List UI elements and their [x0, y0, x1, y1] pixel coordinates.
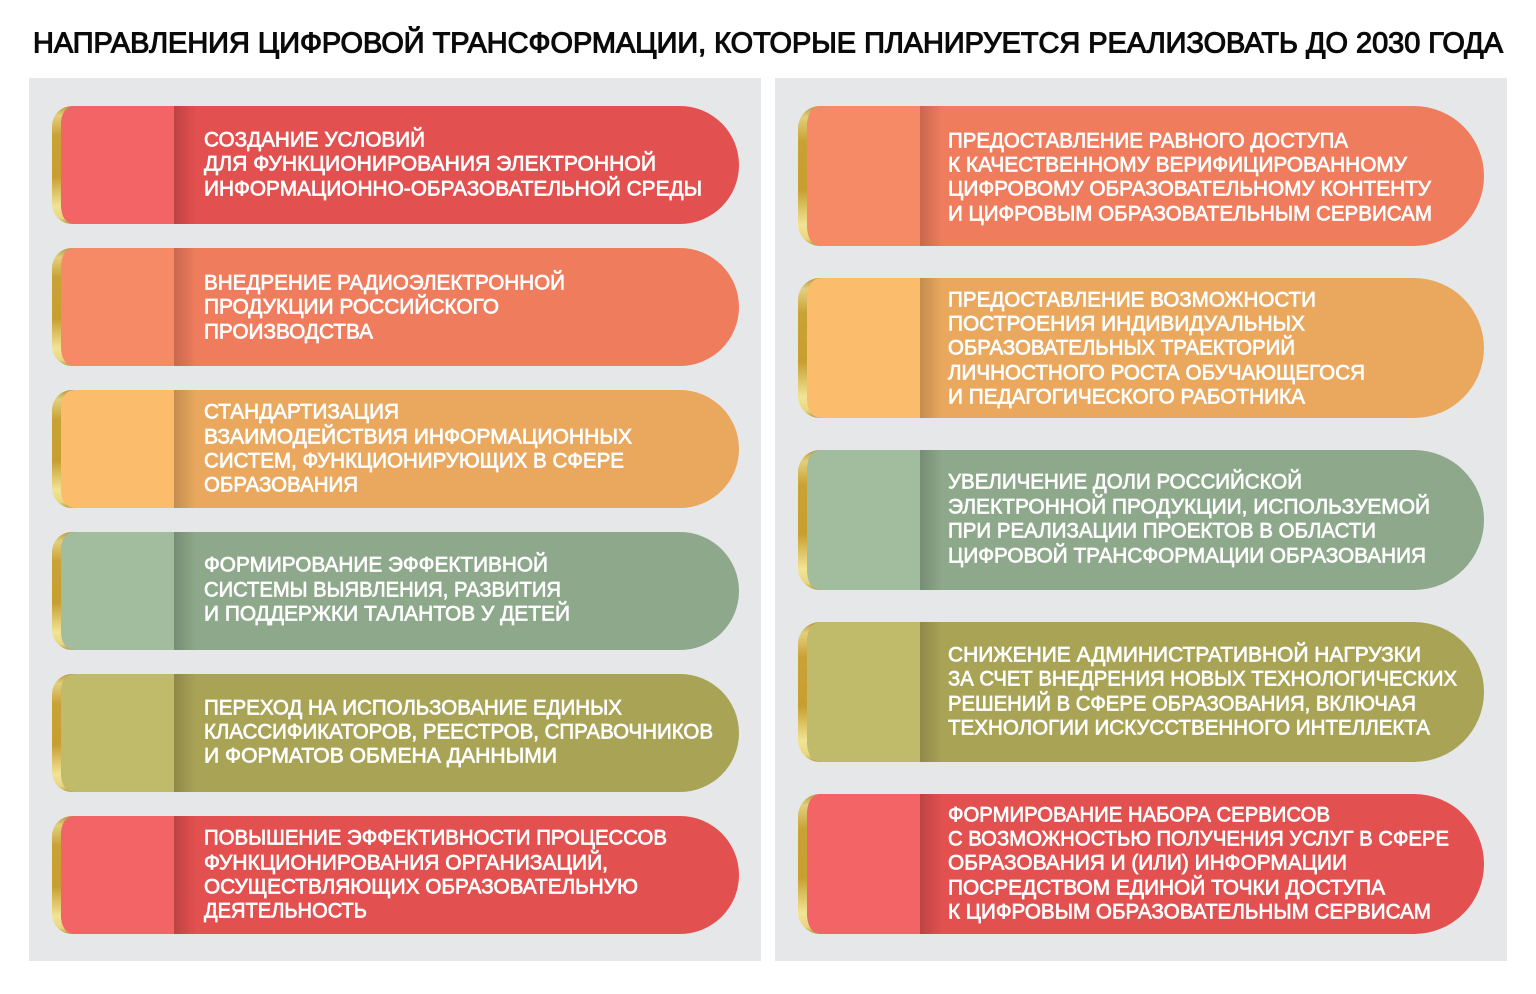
pill: доля российской продукции: ЦИФРОВОЙ ТРАНСФОРМАЦИИ ОБРАЗОВАНИЯ	[948, 544, 1426, 568]
pill: стандартизация	[52, 390, 739, 508]
pill: таланты: ФОРМИРОВАНИЕ ЭФФЕКТИВНОЙ	[204, 552, 548, 576]
pill: стандартизация: ОБРАЗОВАНИЯ	[204, 474, 358, 496]
pill: набор сервисов: С ВОЗМОЖНОСТЬЮ ПОЛУЧЕНИЯ УСЛУГ В СФЕРЕ	[948, 828, 1449, 850]
pill: набор сервисов	[798, 794, 1484, 934]
pill: доля российской продукции	[798, 450, 1484, 590]
pill: индивидуальные траектории: ПРЕДОСТАВЛЕНИЕ ВОЗМОЖНОСТИ	[948, 288, 1316, 312]
pill: доля российской продукции: ЭЛЕКТРОННОЙ ПРОДУКЦИИ, ИСПОЛЬЗУЕМОЙ	[948, 494, 1430, 518]
pill: таланты	[52, 532, 739, 650]
pill: радиоэлектронная продукция	[52, 248, 739, 366]
pill: электронная среда: ИНФОРМАЦИОННО-ОБРАЗОВАТЕЛЬНОЙ СРЕДЫ	[204, 176, 702, 200]
pill: административная нагрузка: РЕШЕНИЙ В СФЕРЕ ОБРАЗОВАНИЯ, ВКЛЮЧАЯ	[948, 692, 1416, 716]
pill: классификаторы: КЛАССИФИКАТОРОВ, РЕЕСТРОВ, СПРАВОЧНИКОВ	[204, 720, 713, 744]
pill: эффективность процессов: ДЕЯТЕЛЬНОСТЬ	[204, 900, 367, 922]
pill: равный доступ: К КАЧЕСТВЕННОМУ ВЕРИФИЦИРОВАННОМУ	[948, 154, 1408, 176]
pill: классификаторы: И ФОРМАТОВ ОБМЕНА ДАННЫМИ	[204, 744, 557, 768]
pill: административная нагрузка: СНИЖЕНИЕ АДМИНИСТРАТИВНОЙ НАГРУЗКИ	[948, 642, 1421, 666]
pill: индивидуальные траектории: ОБРАЗОВАТЕЛЬНЫХ ТРАЕКТОРИЙ	[948, 336, 1295, 360]
pill: электронная среда	[52, 106, 739, 224]
pill: набор сервисов: К ЦИФРОВЫМ ОБРАЗОВАТЕЛЬНЫМ СЕРВИСАМ	[948, 900, 1431, 924]
pill: электронная среда: СОЗДАНИЕ УСЛОВИЙ	[204, 128, 425, 152]
pill: равный доступ: ПРЕДОСТАВЛЕНИЕ РАВНОГО ДОСТУПА	[948, 130, 1348, 152]
pill: административная нагрузка: ЗА СЧЕТ ВНЕДРЕНИЯ НОВЫХ ТЕХНОЛОГИЧЕСКИХ	[948, 668, 1457, 690]
pill: индивидуальные траектории	[798, 278, 1484, 418]
pill: индивидуальные траектории: И ПЕДАГОГИЧЕСКОГО РАБОТНИКА	[948, 386, 1305, 408]
panel: right column	[775, 78, 1507, 961]
pill: доля российской продукции: УВЕЛИЧЕНИЕ ДОЛИ РОССИЙСКОЙ	[948, 470, 1302, 494]
pill: стандартизация: ВЗАИМОДЕЙСТВИЯ ИНФОРМАЦИОННЫХ	[204, 424, 632, 448]
pill: набор сервисов: ОБРАЗОВАНИЯ И (ИЛИ) ИНФОРМАЦИИ	[948, 852, 1347, 874]
panel: left column	[29, 78, 761, 961]
pill: классификаторы: ПЕРЕХОД НА ИСПОЛЬЗОВАНИЕ ЕДИНЫХ	[204, 696, 622, 720]
pill: эффективность процессов: ФУНКЦИОНИРОВАНИЯ ОРГАНИЗАЦИЙ,	[204, 850, 608, 874]
pill: индивидуальные траектории: ПОСТРОЕНИЯ ИНДИВИДУАЛЬНЫХ	[948, 312, 1305, 336]
pill: радиоэлектронная продукция: ПРОДУКЦИИ РОССИЙСКОГО	[204, 294, 499, 318]
pill: доля российской продукции: ПРИ РЕАЛИЗАЦИИ ПРОЕКТОВ В ОБЛАСТИ	[948, 520, 1376, 542]
pill: эффективность процессов: ОСУЩЕСТВЛЯЮЩИХ ОБРАЗОВАТЕЛЬНУЮ	[204, 876, 638, 898]
pill: стандартизация: СТАНДАРТИЗАЦИЯ	[204, 400, 399, 424]
pill: таланты: СИСТЕМЫ ВЫЯВЛЕНИЯ, РАЗВИТИЯ	[204, 578, 561, 602]
pill: электронная среда: ДЛЯ ФУНКЦИОНИРОВАНИЯ ЭЛЕКТРОННОЙ	[204, 152, 656, 176]
pill: стандартизация: СИСТЕМ, ФУНКЦИОНИРУЮЩИХ В СФЕРЕ	[204, 450, 624, 472]
pill: индивидуальные траектории: ЛИЧНОСТНОГО РОСТА ОБУЧАЮЩЕГОСЯ	[948, 362, 1365, 384]
pill: набор сервисов: ПОСРЕДСТВОМ ЕДИНОЙ ТОЧКИ ДОСТУПА	[948, 876, 1385, 900]
pill: радиоэлектронная продукция: ВНЕДРЕНИЕ РАДИОЭЛЕКТРОННОЙ	[204, 270, 565, 294]
pill: административная нагрузка: ТЕХНОЛОГИИ ИСКУССТВЕННОГО ИНТЕЛЛЕКТА	[948, 716, 1430, 740]
title: НАПРАВЛЕНИЯ ЦИФРОВОЙ ТРАНСФОРМАЦИИ, КОТОРЫЕ ПЛАНИРУЕТСЯ РЕАЛИЗОВАТЬ ДО 2030 ГОДА	[33, 28, 1503, 60]
pill: набор сервисов: ФОРМИРОВАНИЕ НАБОРА СЕРВИСОВ	[948, 804, 1330, 826]
pill: эффективность процессов: ПОВЫШЕНИЕ ЭФФЕКТИВНОСТИ ПРОЦЕССОВ	[204, 826, 667, 850]
pill: равный доступ: И ЦИФРОВЫМ ОБРАЗОВАТЕЛЬНЫМ СЕРВИСАМ	[948, 202, 1432, 226]
pill: классификаторы	[52, 674, 739, 792]
pill: равный доступ: ЦИФРОВОМУ ОБРАЗОВАТЕЛЬНОМУ КОНТЕНТУ	[948, 178, 1432, 200]
pill: таланты: И ПОДДЕРЖКИ ТАЛАНТОВ У ДЕТЕЙ	[204, 602, 570, 626]
pill: равный доступ	[798, 106, 1484, 246]
pill: радиоэлектронная продукция: ПРОИЗВОДСТВА	[204, 320, 373, 344]
pill: административная нагрузка	[798, 622, 1484, 762]
pill: эффективность процессов	[52, 816, 739, 934]
